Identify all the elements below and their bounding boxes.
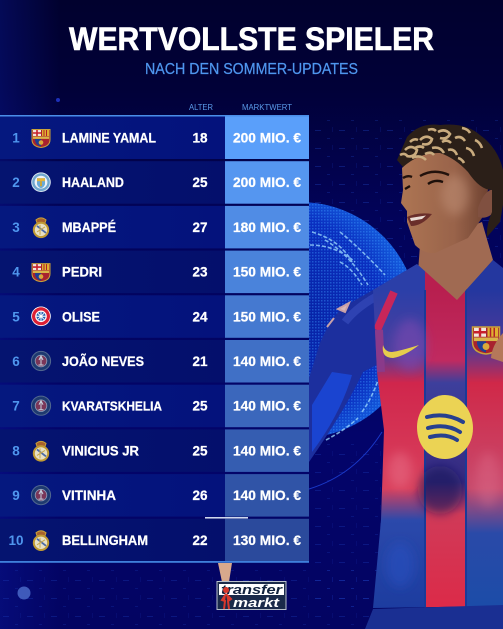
neck	[418, 222, 493, 301]
row 9: VITINHA	[62, 488, 116, 503]
player left arm	[309, 264, 417, 462]
row 7	[0, 385, 309, 427]
row 6: JOÃO NEVES	[62, 354, 144, 369]
player shorts	[365, 605, 503, 629]
row 5: 24	[192, 309, 208, 324]
ranking table	[0, 115, 309, 563]
row 6: 6	[12, 354, 20, 369]
row 10	[0, 519, 309, 561]
row 1: 1	[12, 130, 20, 146]
eyes	[405, 181, 443, 189]
row 7: 7	[12, 399, 20, 414]
row 1	[0, 116, 309, 159]
globe	[309, 202, 407, 490]
row 7: 140 MIO. €	[233, 399, 301, 414]
row 3	[0, 206, 309, 248]
row 4: 150 MIO. €	[233, 265, 301, 280]
ear	[478, 189, 499, 218]
row 3: 27	[192, 220, 208, 235]
row 3: MBAPPÉ	[62, 220, 116, 235]
row 8: VINICIUS JR	[62, 443, 139, 458]
row 9: 26	[192, 488, 208, 503]
row 5: OLISE	[62, 309, 100, 324]
row 8: 140 MIO. €	[233, 443, 301, 458]
row 5: 150 MIO. €	[233, 309, 301, 324]
row 8	[0, 429, 309, 472]
row 4: 23	[192, 265, 208, 280]
row 10: BELLINGHAM	[62, 533, 148, 548]
row 6	[0, 340, 309, 382]
row 2: 2	[12, 175, 20, 190]
row 2: 200 MIO. €	[233, 175, 301, 190]
row 3: 180 MIO. €	[233, 220, 301, 235]
column header: market value: MARKTWERT	[242, 103, 292, 112]
row 10: 10	[8, 533, 24, 548]
row 5: 5	[12, 309, 20, 324]
row 1: 18	[192, 130, 208, 146]
player face	[401, 145, 490, 253]
subtitle: NACH DEN SOMMER-UPDATES	[145, 61, 358, 78]
row 9: 9	[12, 488, 20, 503]
hand	[491, 333, 503, 362]
row 8: 25	[192, 443, 208, 458]
row 4: 4	[12, 265, 20, 280]
mouth	[407, 213, 432, 226]
title: WERTVOLLSTE SPIELER	[69, 21, 434, 57]
row 6: 140 MIO. €	[233, 354, 301, 369]
leg below table	[218, 563, 232, 582]
eyebrows	[403, 172, 449, 178]
row 5	[0, 295, 309, 338]
player jersey	[370, 250, 503, 620]
row 1: LAMINE YAMAL	[62, 130, 156, 146]
row 4: PEDRI	[62, 265, 102, 280]
transfermarkt logo	[217, 582, 286, 610]
row 3: 3	[12, 220, 20, 235]
row 4	[0, 251, 309, 293]
row 9: 140 MIO. €	[233, 488, 301, 503]
crest on jersey	[472, 327, 500, 354]
row 7: KVARATSKHELIA	[62, 400, 162, 414]
row 1: 200 MIO. €	[233, 130, 301, 146]
spotify sponsor	[417, 395, 473, 459]
row 10: 130 MIO. €	[233, 533, 301, 548]
column header: age: ALTER	[189, 103, 213, 112]
row 9	[0, 474, 309, 517]
row 10: 22	[192, 533, 208, 548]
row 2: HAALAND	[62, 175, 124, 190]
row 2	[0, 161, 309, 204]
row 2: 25	[192, 175, 208, 190]
player photo	[309, 124, 503, 629]
transfermarkt logo: transfer	[221, 583, 283, 597]
hair	[397, 124, 503, 237]
face highlight	[441, 175, 469, 215]
row 7: 25	[192, 399, 208, 414]
nike swoosh	[383, 345, 419, 358]
row 6: 21	[192, 354, 208, 369]
transfermarkt logo: markt	[233, 596, 280, 610]
row 8: 8	[12, 443, 20, 458]
